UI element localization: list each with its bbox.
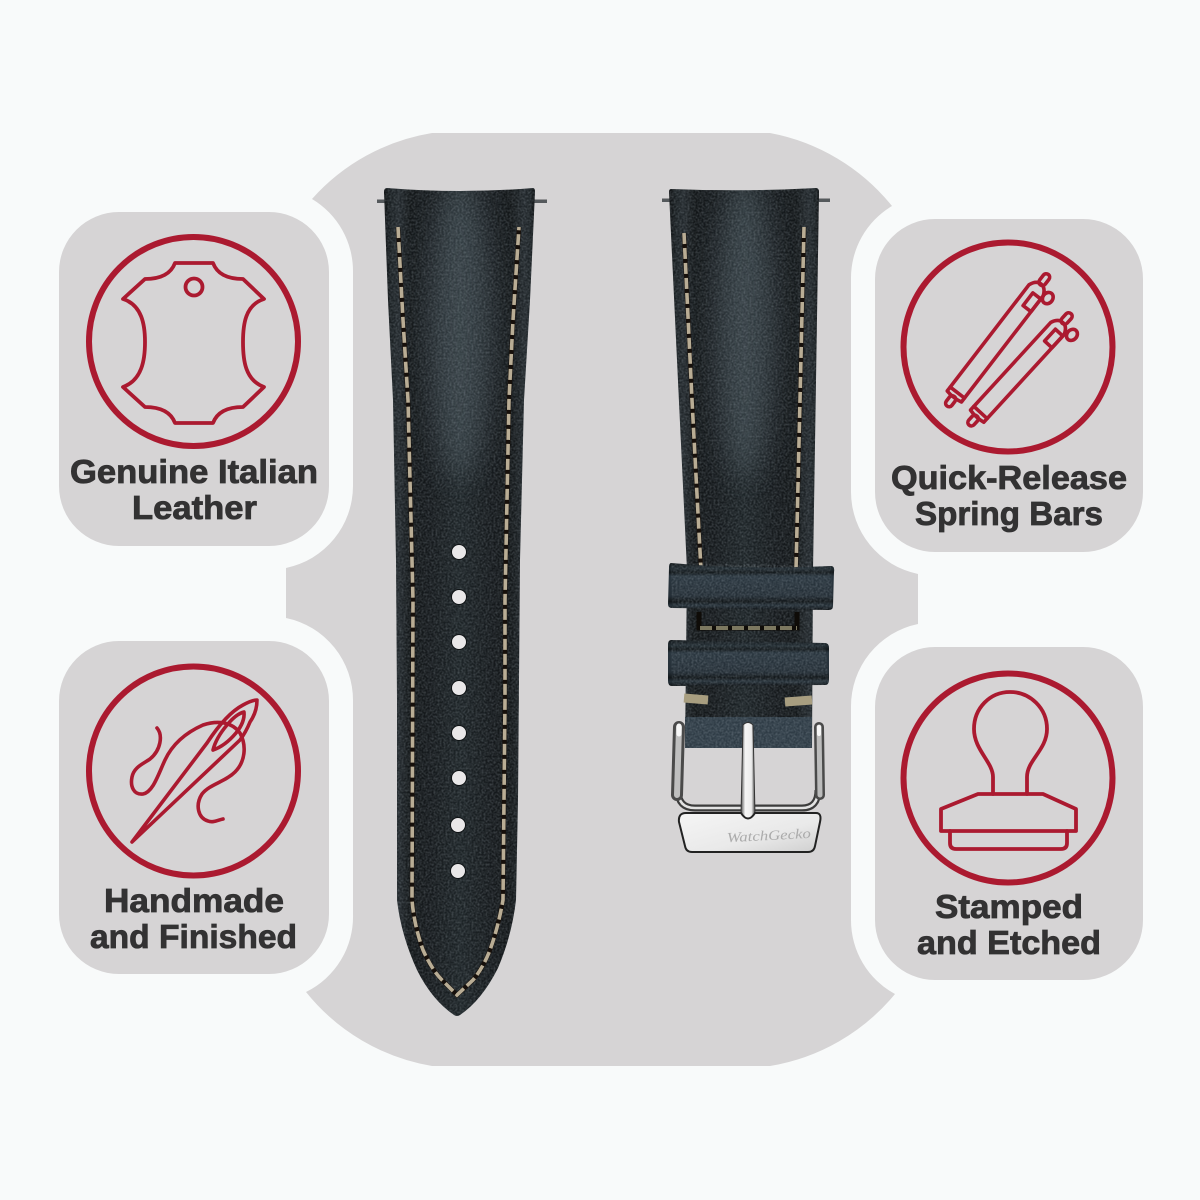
strap lower tab	[685, 717, 812, 748]
label: quick-release spring bars: Spring Bars	[915, 495, 1103, 532]
long strap piece	[377, 180, 547, 1016]
label: genuine italian leather: Genuine Italian	[70, 453, 318, 490]
buckle frame lower bar	[678, 790, 818, 808]
icon circle	[904, 242, 1112, 452]
icon: spring bars	[940, 269, 1086, 439]
spring bar 2	[962, 308, 1086, 439]
panel: quick-release spring bars	[875, 219, 1143, 552]
central panel: strap backdrop	[286, 133, 918, 1066]
keeper loop 1	[668, 563, 834, 610]
buckle	[677, 722, 820, 852]
strap body: long	[384, 188, 535, 1016]
label: stamped and etched	[917, 888, 1101, 961]
icon circle	[89, 666, 298, 876]
stitching: long strap	[398, 227, 519, 995]
keeper loop 2	[668, 640, 829, 686]
thick stitches near buckle	[684, 698, 812, 702]
label: handmade and finished: and Finished	[90, 918, 297, 955]
spring bar: buckle strap	[662, 198, 830, 202]
spring bar 1	[940, 269, 1063, 418]
label: handmade and finished: Handmade	[104, 882, 284, 919]
buckle posts	[677, 727, 679, 795]
label: genuine italian leather: Leather	[132, 489, 257, 526]
buckle strap piece	[662, 180, 834, 852]
sheen	[428, 180, 492, 480]
icon: stamp	[941, 692, 1076, 849]
sheen	[715, 180, 775, 480]
leather grain	[669, 188, 819, 747]
leather grain	[384, 188, 535, 1016]
label: quick-release spring bars	[891, 459, 1127, 532]
label: quick-release spring bars: Quick-Release	[891, 459, 1127, 496]
icon circle	[89, 237, 298, 446]
strap body: buckle side	[669, 188, 819, 747]
label: genuine italian leather	[70, 453, 318, 526]
panel: handmade and finished	[59, 641, 329, 974]
buckle tongue	[741, 722, 755, 826]
panel: genuine italian leather	[59, 212, 329, 546]
icon: leather hide	[123, 263, 264, 423]
spring bar: long strap	[377, 200, 547, 203]
label: handmade and finished	[90, 882, 297, 955]
icon: needle and thread	[131, 700, 257, 842]
label: stamped and etched: and Etched	[917, 924, 1101, 961]
panel: stamped and etched	[875, 647, 1143, 980]
label: stamped and etched: Stamped	[935, 888, 1083, 925]
icon circle	[904, 674, 1112, 882]
stitching: buckle strap	[684, 227, 804, 628]
engraved logo: WatchGecko	[727, 827, 811, 846]
strap holes	[450, 544, 466, 878]
buckle plate	[679, 813, 820, 852]
